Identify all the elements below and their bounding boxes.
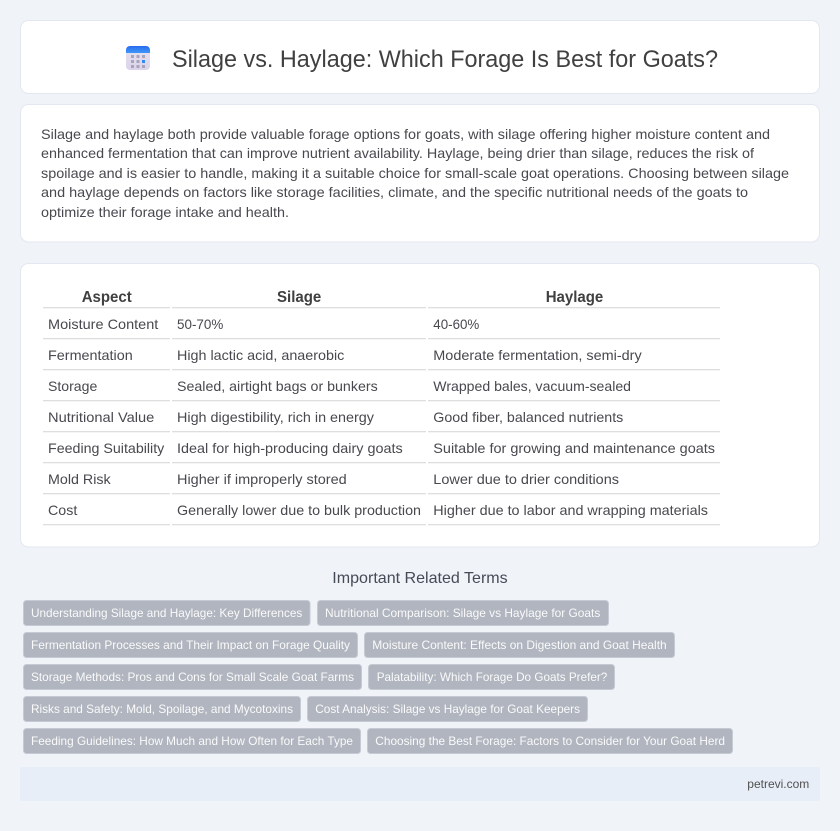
footer bar (20, 767, 820, 801)
table row: feeding suitability: Suitable for growing and maintenance goats (433, 440, 715, 456)
tag (24, 696, 300, 722)
tag: Nutritional Comparison: Silage vs Haylage for Goats (325, 606, 600, 620)
tag (24, 664, 362, 690)
tag (368, 728, 732, 754)
text block: introduction paragraph: and haylage depends on factors like storage facilities, climate, and the specific nutritional needs of the goats to (41, 184, 748, 200)
table row: mold risk: Lower due to drier conditions (433, 471, 619, 487)
tag: Moisture Content: Effects on Digestion and Goat Health (372, 638, 667, 652)
table row: storage: Sealed, airtight bags or bunkers (177, 378, 378, 394)
tag: Cost Analysis: Silage vs Haylage for Goat Keepers (315, 702, 580, 716)
title: Silage vs. Haylage: Which Forage Is Best for Goats? (172, 46, 718, 73)
text block: introduction paragraph: enhanced fermentation that can improve nutrient availability. Haylage, being drier than silage, reduces the risk of (41, 145, 754, 161)
text block: introduction paragraph: Silage and haylage both provide valuable forage options for goats, with silage offering higher moisture content and (41, 126, 770, 142)
table row: storage: Wrapped bales, vacuum-sealed (433, 378, 631, 394)
table row: mold risk (43, 471, 720, 494)
table row: nutritional value: Nutritional Value (48, 409, 155, 425)
table row: storage: Storage (48, 378, 98, 394)
table row: moisture content (43, 316, 720, 339)
tag (368, 664, 614, 690)
tag (24, 600, 310, 626)
table row: moisture content: Moisture Content (48, 316, 158, 332)
tag: Fermentation Processes and Their Impact on Forage Quality (31, 638, 350, 652)
heading: important related terms: Important Related Terms (332, 570, 508, 587)
table row: fermentation: Moderate fermentation, semi-dry (433, 347, 642, 363)
table row: fermentation: Fermentation (48, 347, 133, 363)
table row: cost (43, 502, 720, 525)
table row: cost: Higher due to labor and wrapping materials (433, 502, 708, 518)
tag (24, 728, 360, 754)
panel: introduction (20, 104, 820, 242)
table row: storage (43, 378, 720, 401)
table row: nutritional value (43, 409, 720, 432)
table header row: Haylage (546, 289, 603, 306)
text block: introduction paragraph (41, 126, 789, 220)
tag (24, 632, 358, 658)
table row: nutritional value: High digestibility, rich in energy (177, 409, 374, 425)
icon: calendar grid (126, 46, 150, 70)
table row: cost: Generally lower due to bulk production (177, 502, 421, 518)
table row: feeding suitability: Feeding Suitability (48, 440, 164, 456)
table row: feeding suitability (43, 440, 720, 463)
table row: mold risk: Mold Risk (48, 471, 112, 487)
table header row: Aspect (82, 289, 132, 306)
table row: moisture content: 40-60% (433, 316, 479, 332)
table row: cost: Cost (48, 502, 77, 518)
tag: Choosing the Best Forage: Factors to Consider for Your Goat Herd (375, 734, 725, 748)
tag: Palatability: Which Forage Do Goats Prefer? (377, 670, 608, 684)
tag: Understanding Silage and Haylage: Key Differences (31, 606, 302, 620)
tag (364, 632, 674, 658)
table row: fermentation (43, 347, 720, 370)
table row: fermentation: High lactic acid, anaerobic (177, 347, 344, 363)
header panel (20, 20, 820, 94)
tag: Storage Methods: Pros and Cons for Small Scale Goat Farms (31, 670, 354, 684)
tag: Risks and Safety: Mold, Spoilage, and Mycotoxins (31, 702, 293, 716)
table header row (43, 289, 720, 308)
table row: nutritional value: Good fiber, balanced nutrients (433, 409, 623, 425)
panel: related term tags (24, 600, 732, 754)
text block: introduction paragraph: optimize their forage intake and health. (41, 204, 289, 220)
tag (318, 600, 608, 626)
panel: comparison table (20, 264, 820, 547)
table row: mold risk: Higher if improperly stored (177, 471, 347, 487)
footer credit: petrevi.com (747, 777, 809, 791)
text block: introduction paragraph: spoilage and is easier to handle, making it a suitable choice for small-scale goat operations. Choosing between silage (41, 165, 789, 181)
tag: Feeding Guidelines: How Much and How Often for Each Type (31, 734, 353, 748)
table row: feeding suitability: Ideal for high-producing dairy goats (177, 440, 403, 456)
table row: moisture content: 50-70% (177, 316, 223, 332)
table header row: Silage (277, 289, 321, 306)
tag (308, 696, 588, 722)
